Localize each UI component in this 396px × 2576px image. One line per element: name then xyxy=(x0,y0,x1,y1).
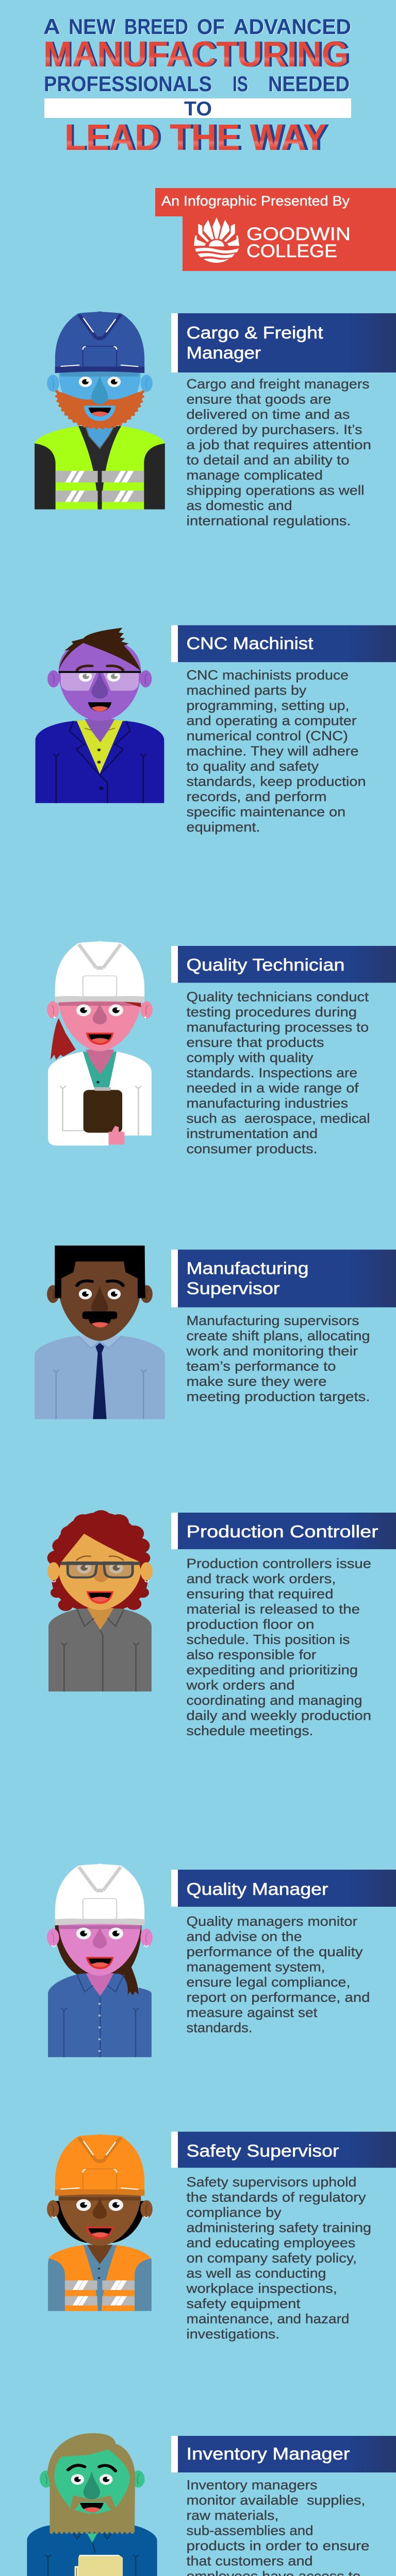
text: production controller: and track work orders, xyxy=(187,1571,336,1586)
text: quality technician: Quality technicians conduct xyxy=(187,989,369,1005)
text: quality technician: consumer products. xyxy=(187,1141,318,1156)
character: safety supervisor xyxy=(47,2134,153,2311)
text: safety supervisor: and educating employees xyxy=(187,2235,355,2250)
title: MANUFACTURING xyxy=(43,34,349,74)
text: production controller: daily and weekly production xyxy=(187,1707,371,1723)
title: LEAD THE WAY xyxy=(67,117,329,158)
title: NEEDED xyxy=(268,72,350,96)
text: quality technician: ensure that products xyxy=(187,1035,324,1050)
text: inventory manager: raw materials, xyxy=(187,2507,278,2523)
panel: safety supervisor xyxy=(47,2132,396,2342)
text: safety supervisor xyxy=(186,2174,371,2342)
text: manufacturing supervisor: work and monitoring their xyxy=(186,1343,358,1359)
title: IS xyxy=(233,72,248,96)
character: manufacturing supervisor xyxy=(35,1246,165,1419)
title: NEEDED xyxy=(269,72,351,96)
text: cnc machinist xyxy=(187,667,366,835)
title: ADVANCED xyxy=(234,14,351,39)
text: production controller: schedule meetings. xyxy=(187,1723,314,1738)
heading: quality manager: Quality Manager xyxy=(187,1879,328,1899)
text: cnc machinist: specific maintenance on xyxy=(187,804,345,819)
text: safety supervisor: as well as conducting xyxy=(187,2265,326,2281)
presented by panel: COLLEGE xyxy=(246,241,337,261)
title: A xyxy=(43,14,60,39)
text: cargo and freight manager: Cargo and freight managers xyxy=(187,376,369,392)
title: PROFESSIONALS xyxy=(44,72,212,96)
text: cnc machinist: CNC machinists produce xyxy=(187,667,349,683)
title: OF xyxy=(197,14,225,39)
heading: cargo and freight manager xyxy=(171,313,396,372)
text: cargo and freight manager: international regulations. xyxy=(187,513,351,528)
title: BREED xyxy=(124,14,188,39)
text: cnc machinist: equipment. xyxy=(187,819,260,835)
text: production controller: material is released to the xyxy=(187,1601,360,1617)
heading: manufacturing supervisor xyxy=(171,1250,396,1308)
heading: cnc machinist xyxy=(171,625,396,662)
text: quality technician: testing procedures during xyxy=(187,1004,357,1020)
text: manufacturing supervisor: make sure they were xyxy=(187,1374,327,1389)
character: quality manager xyxy=(47,1863,153,2057)
text: quality manager: performance of the quality xyxy=(187,1944,363,1959)
character: cnc machinist xyxy=(36,628,164,803)
text: inventory manager: that customers and xyxy=(187,2553,312,2569)
heading: safety supervisor: Safety Supervisor xyxy=(187,2141,339,2160)
text: quality manager: management system, xyxy=(187,1959,325,1974)
text: safety supervisor: investigations. xyxy=(187,2326,279,2342)
title: A xyxy=(44,14,61,39)
panel: manufacturing supervisor xyxy=(35,1246,396,1419)
title: ADVANCED xyxy=(234,14,352,39)
heading: cnc machinist: CNC Machinist xyxy=(187,634,314,653)
text: quality manager: Quality managers monitor xyxy=(187,1913,357,1929)
presented by panel xyxy=(155,188,396,271)
text: inventory manager: products in order to ensure xyxy=(187,2538,369,2553)
text: production controller: Production controllers issue xyxy=(187,1556,371,1571)
title: LEAD THE WAY xyxy=(64,117,326,158)
panel: inventory manager xyxy=(27,2433,396,2576)
text: cargo and freight manager: as domestic and xyxy=(187,498,292,513)
text: production controller: expediting and prioritizing xyxy=(187,1662,358,1677)
title: BREED xyxy=(125,14,189,39)
text: quality technician: needed in a wide range of xyxy=(187,1080,359,1095)
heading: inventory manager: Inventory Manager xyxy=(187,2444,350,2463)
character: cargo manager xyxy=(35,311,165,510)
title: MANUFACTURING xyxy=(45,34,351,74)
text: safety supervisor: the standards of regulatory xyxy=(187,2190,366,2205)
character: production controller xyxy=(47,1510,153,1691)
heading: production controller: Production Controller xyxy=(187,1522,378,1541)
heading: quality manager xyxy=(171,1870,396,1907)
heading: manufacturing supervisor: Manufacturing xyxy=(187,1259,308,1278)
title: OF xyxy=(198,14,226,39)
title: IS xyxy=(233,72,249,96)
text: quality manager: and advise on the xyxy=(187,1929,302,1944)
text: quality technician: manufacturing industries xyxy=(187,1095,348,1111)
text: manufacturing supervisor: meeting production targets. xyxy=(187,1389,370,1404)
title: NEW xyxy=(69,14,116,39)
text: manufacturing supervisor: team’s performance to xyxy=(187,1358,336,1374)
text: safety supervisor: Safety supervisors uphold xyxy=(187,2174,357,2190)
text: safety supervisor: workplace inspections, xyxy=(186,2280,337,2296)
heading: quality technician: Quality Technician xyxy=(187,955,344,974)
text: quality manager xyxy=(187,1913,370,2035)
character: quality technician xyxy=(47,941,153,1145)
text: cnc machinist: machined parts by xyxy=(187,682,306,698)
text: cargo and freight manager: ordered by purchasers. It’s xyxy=(187,421,362,437)
text: quality technician: such as aerospace, medical xyxy=(187,1111,370,1126)
text: production controller: ensuring that required xyxy=(187,1586,333,1601)
text: quality manager: ensure legal compliance, xyxy=(187,1974,351,1990)
text: quality technician: instrumentation and xyxy=(187,1126,318,1141)
panel: quality technician xyxy=(47,941,396,1156)
heading: quality technician xyxy=(171,946,396,983)
text: cnc machinist: and operating a computer xyxy=(187,713,357,728)
text: cnc machinist: standards, keep production xyxy=(187,774,366,789)
presented by panel: An Infographic Presented By xyxy=(161,193,350,209)
text: safety supervisor: on company safety policy, xyxy=(187,2250,357,2266)
text: quality technician xyxy=(187,989,370,1156)
text: quality technician: comply with quality xyxy=(187,1050,314,1065)
text: cargo and freight manager: a job that requires attention xyxy=(187,437,371,452)
heading: cargo and freight manager: Cargo & Freight xyxy=(187,323,323,342)
title: TO xyxy=(184,98,212,120)
text: production controller: production floor on xyxy=(187,1617,315,1632)
heading: cargo and freight manager: Manager xyxy=(187,343,261,362)
text: inventory manager: sub-assemblies and xyxy=(187,2522,314,2538)
text: cargo and freight manager: shipping operations as well xyxy=(187,482,364,498)
heading: inventory manager xyxy=(171,2436,396,2472)
text: cargo and freight manager: delivered on time and as xyxy=(187,406,350,422)
text: cargo and freight manager: manage complicated xyxy=(187,467,323,483)
presented by panel: GOODWIN xyxy=(246,224,351,244)
text: safety supervisor: compliance by xyxy=(187,2205,282,2220)
text: cnc machinist: numerical control (CNC) xyxy=(187,728,348,743)
text: cnc machinist: records, and perform xyxy=(187,789,327,804)
text: cnc machinist: machine. They will adhere xyxy=(187,743,359,758)
text: safety supervisor: maintenance, and hazard xyxy=(187,2311,350,2327)
text: production controller: schedule. This position is xyxy=(187,1632,350,1647)
text: cnc machinist: to quality and safety xyxy=(187,758,319,774)
text: manufacturing supervisor xyxy=(186,1313,370,1404)
title: PROFESSIONALS xyxy=(44,72,212,96)
text: cargo and freight manager: ensure that goods are xyxy=(187,391,331,406)
title xyxy=(43,14,352,158)
text: production controller xyxy=(186,1556,371,1738)
text: quality technician: manufacturing processes to xyxy=(187,1019,369,1035)
text: production controller: coordinating and managing xyxy=(187,1692,362,1708)
panel: cargo and freight manager xyxy=(35,311,396,528)
text: inventory manager xyxy=(187,2477,369,2576)
title: NEW xyxy=(69,14,117,39)
text: cnc machinist: programming, setting up, xyxy=(187,698,350,713)
text: production controller: work orders and xyxy=(186,1677,295,1693)
panel: quality manager xyxy=(47,1863,396,2057)
text: quality manager: standards. xyxy=(187,2020,253,2035)
text: production controller: also responsible for xyxy=(187,1647,317,1662)
text: inventory manager: Inventory managers xyxy=(187,2477,318,2493)
text: cargo and freight manager xyxy=(187,376,371,528)
text: quality manager: report on performance, and xyxy=(187,1990,370,2005)
heading: production controller xyxy=(171,1513,396,1549)
text: safety supervisor: administering safety training xyxy=(187,2219,371,2235)
heading: safety supervisor xyxy=(171,2132,396,2168)
heading: manufacturing supervisor: Supervisor xyxy=(187,1279,280,1298)
text: quality manager: measure against set xyxy=(187,2005,318,2020)
panel: production controller xyxy=(47,1510,396,1738)
text: cargo and freight manager: to detail and an ability to xyxy=(187,452,350,467)
character: inventory manager xyxy=(27,2433,157,2576)
panel: cnc machinist xyxy=(36,625,396,835)
text: manufacturing supervisor: Manufacturing supervisors xyxy=(187,1313,359,1328)
text: inventory manager: monitor available supplies, xyxy=(187,2493,365,2508)
text: manufacturing supervisor: create shift plans, allocating xyxy=(187,1328,370,1344)
text: safety supervisor: safety equipment xyxy=(187,2296,301,2311)
text: quality technician: standards. Inspections are xyxy=(187,1065,357,1080)
